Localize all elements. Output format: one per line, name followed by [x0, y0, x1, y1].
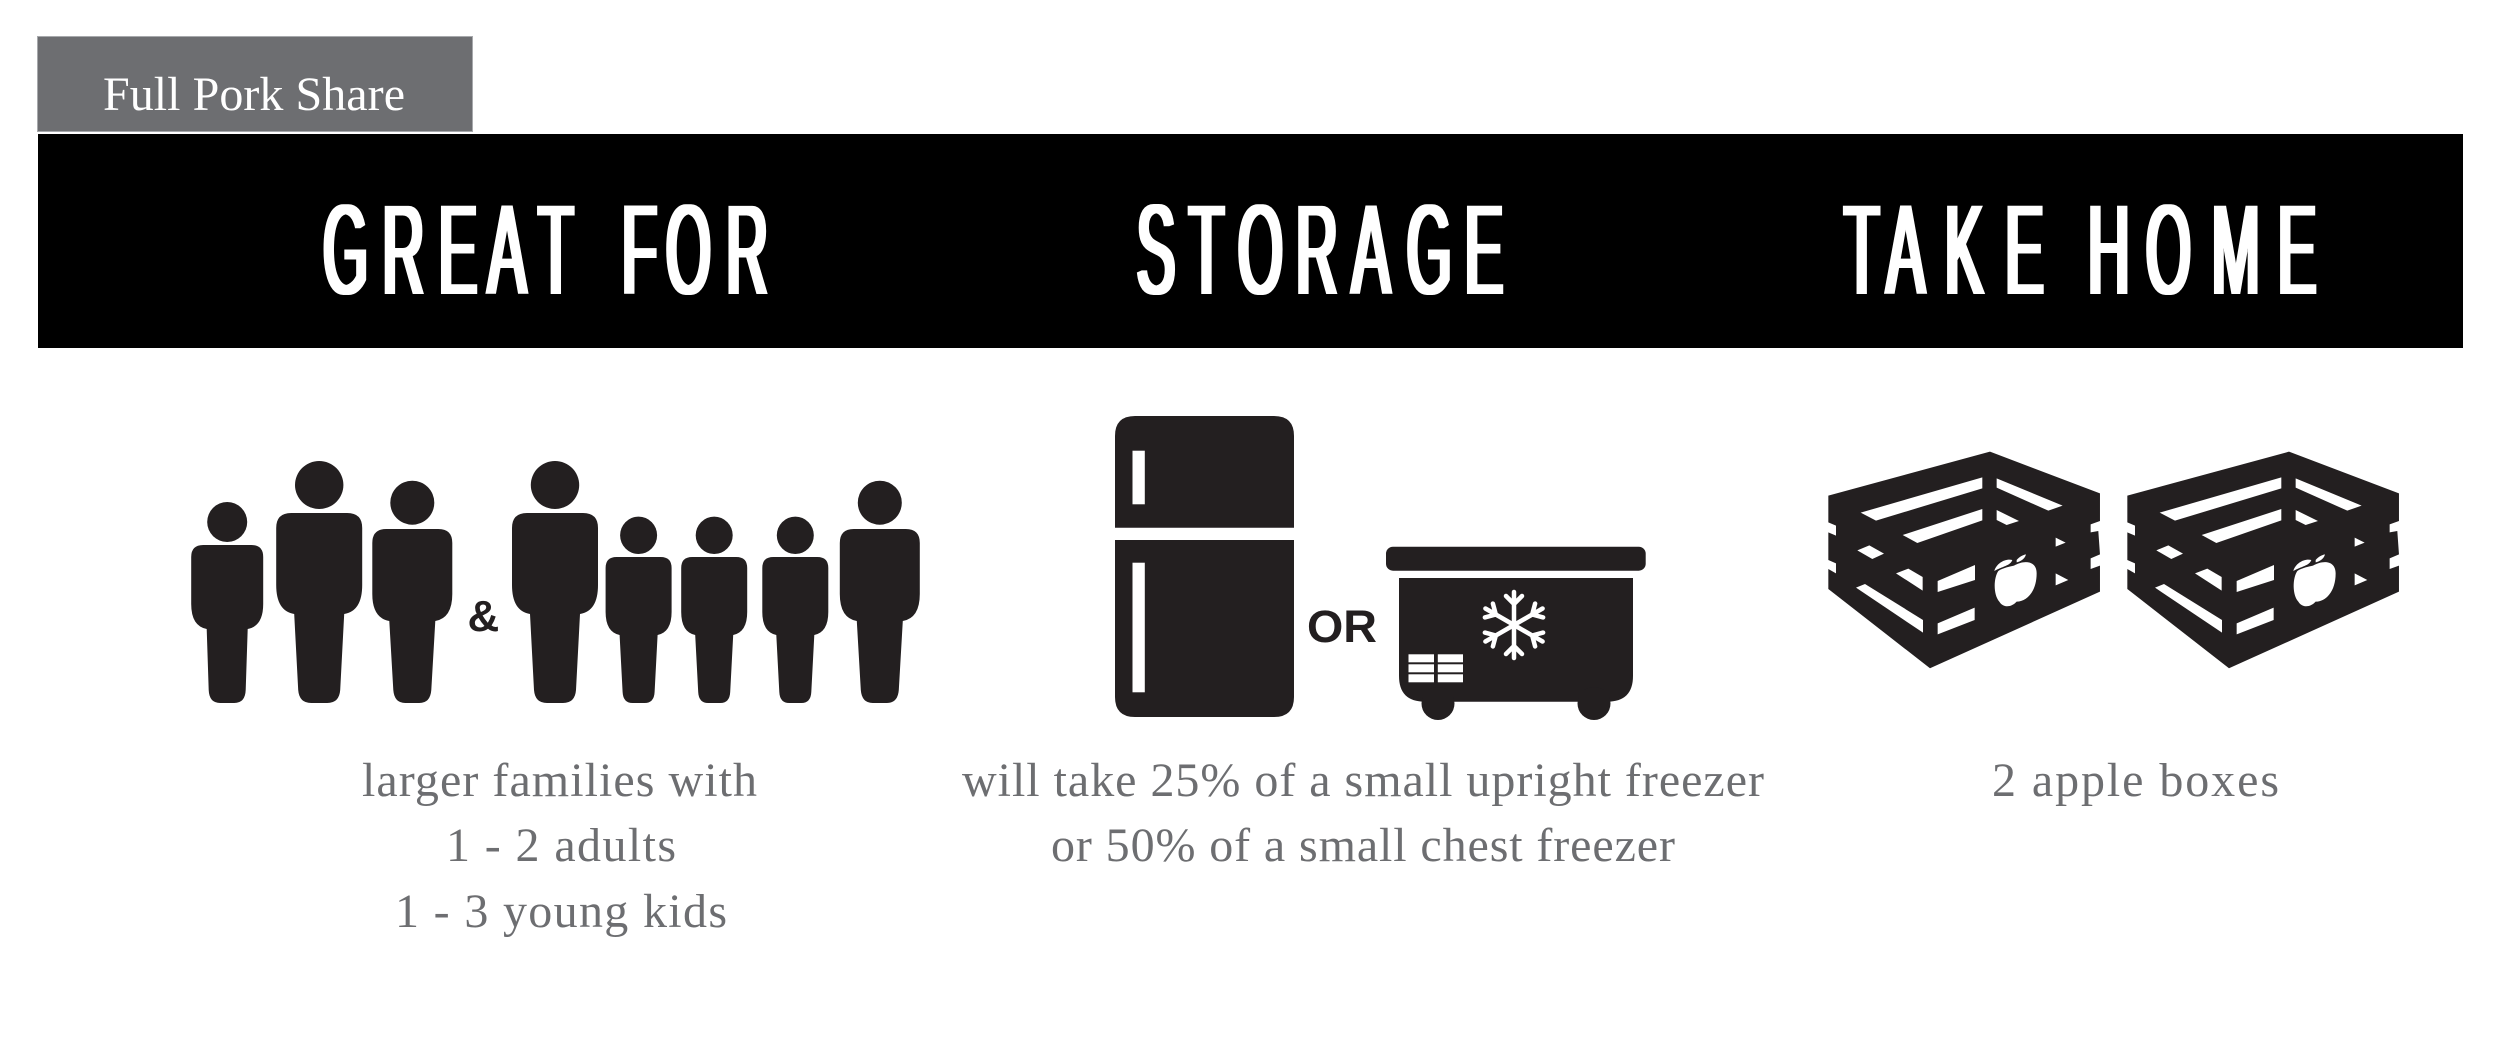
child 2 [681, 517, 747, 703]
vent grid [1408, 654, 1463, 682]
person 2 [276, 461, 362, 703]
icon: apple box 1 [1828, 452, 2100, 668]
heading: GREAT FOR: GREAT FOR [323, 179, 768, 322]
heading: STORAGE: STORAGE [1137, 179, 1503, 322]
text: great for description: 1 - 3 young kids [395, 885, 727, 938]
ampersand: & [468, 592, 499, 641]
icon: apple box 2 [2127, 452, 2399, 668]
text: take home description: 2 apple boxes [1992, 754, 2279, 807]
person 3 [372, 481, 452, 703]
label: OR: OR [1307, 601, 1377, 652]
snowflake [1481, 592, 1547, 658]
icon: family of people [191, 461, 920, 703]
text: great for description: 1 - 2 adults [446, 819, 676, 872]
child 3 [762, 517, 828, 703]
text: great for description [362, 754, 757, 938]
heading: TAKE HOME: TAKE HOME [1844, 179, 2316, 322]
person 1 [191, 502, 263, 703]
text: storage description [962, 754, 1764, 872]
text: storage description: or 50% of a small chest freezer [1051, 819, 1675, 872]
tab: Full Pork Share [38, 36, 472, 132]
icon: upright freezer [1115, 416, 1294, 717]
child 1 [606, 517, 672, 703]
person 4 [512, 461, 598, 703]
text: storage description: will take 25% of a small upright freezer [962, 754, 1764, 807]
icon: chest freezer [1386, 547, 1646, 720]
header band [38, 134, 2463, 348]
tab: Full Pork Share: Full Pork Share [103, 68, 405, 121]
text: great for description: larger families with [362, 754, 757, 807]
person 5 [840, 481, 920, 703]
